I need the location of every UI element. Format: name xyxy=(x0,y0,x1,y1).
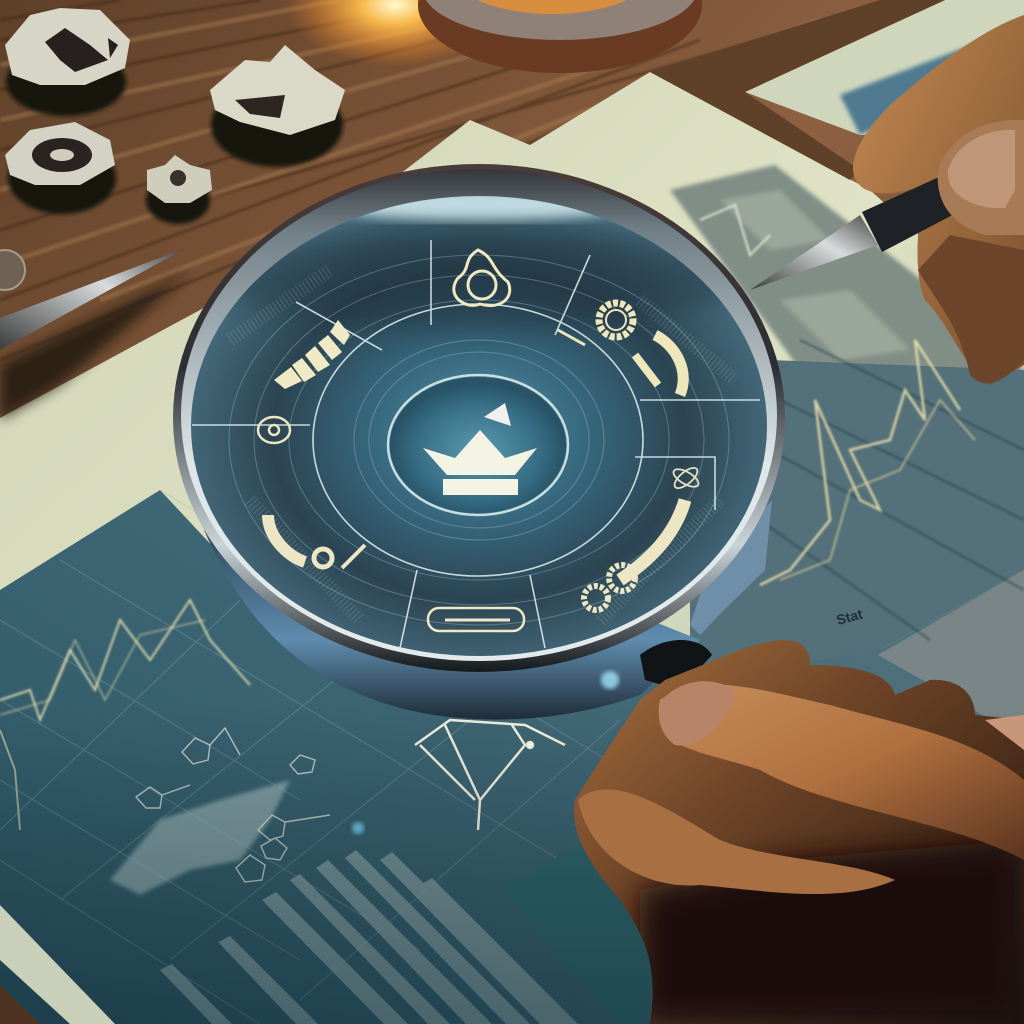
grey chart, upper right xyxy=(670,165,1024,440)
barrel right side plate xyxy=(690,500,772,635)
thumb xyxy=(938,120,1024,235)
icon: pear outline xyxy=(454,250,510,306)
gear top left xyxy=(5,8,130,85)
teal data sheet xyxy=(0,400,1024,1024)
icon: striped bar xyxy=(274,320,350,389)
icon: atom right xyxy=(671,464,701,492)
pale paper sheet, upper right corner xyxy=(745,0,1024,135)
hexagon diagram below lens xyxy=(415,720,565,830)
gear top centre xyxy=(210,45,345,135)
index finger xyxy=(659,684,1024,860)
hand, lower right, holding magnifier xyxy=(574,640,1024,1024)
lower right teal panel xyxy=(500,840,670,1024)
gear middle left xyxy=(5,122,115,185)
hand shadow xyxy=(640,840,1024,1024)
sun glow at top xyxy=(285,0,505,67)
pale corner, bottom left xyxy=(0,905,115,1024)
right side chart band xyxy=(690,340,1024,680)
magnifying glass xyxy=(173,164,785,720)
pen xyxy=(750,172,962,290)
line chart, lower left xyxy=(0,490,640,1024)
icon: small cursor xyxy=(484,403,511,426)
hand, top right, holding pen xyxy=(750,15,1024,385)
map speckle xyxy=(110,780,290,895)
table strip between sheets xyxy=(650,0,945,180)
glass xyxy=(191,196,767,656)
lens barrel xyxy=(200,520,700,720)
icon: gear upper right xyxy=(599,303,633,337)
icon: pill button xyxy=(428,608,524,631)
molecule network xyxy=(136,728,330,882)
darkening at the bottom xyxy=(0,700,1024,1024)
bar chart, bottom xyxy=(160,850,578,1024)
right side chart band: Stat xyxy=(835,606,865,628)
small gear xyxy=(147,155,212,203)
handle joint xyxy=(601,640,712,690)
icon: wrench and gears lower right xyxy=(584,500,685,610)
coin on table xyxy=(0,250,25,290)
gear icons on table xyxy=(5,8,345,224)
icon: gauge lower left xyxy=(268,515,365,568)
lens contents xyxy=(192,189,760,648)
pen on table xyxy=(0,248,190,420)
glow near molecule xyxy=(352,822,364,834)
thumb xyxy=(578,789,895,894)
icon: crown xyxy=(423,430,537,495)
icon: arc gauge upper right xyxy=(558,330,683,395)
fingernail xyxy=(659,681,735,746)
segment lines xyxy=(192,240,760,648)
icon: target left xyxy=(258,417,290,443)
metal rim xyxy=(173,164,785,672)
magnifier top prop xyxy=(418,0,702,73)
wood corner, bottom left xyxy=(0,985,40,1024)
grey sheet, lower right xyxy=(878,570,1024,740)
speckle xyxy=(230,270,735,620)
